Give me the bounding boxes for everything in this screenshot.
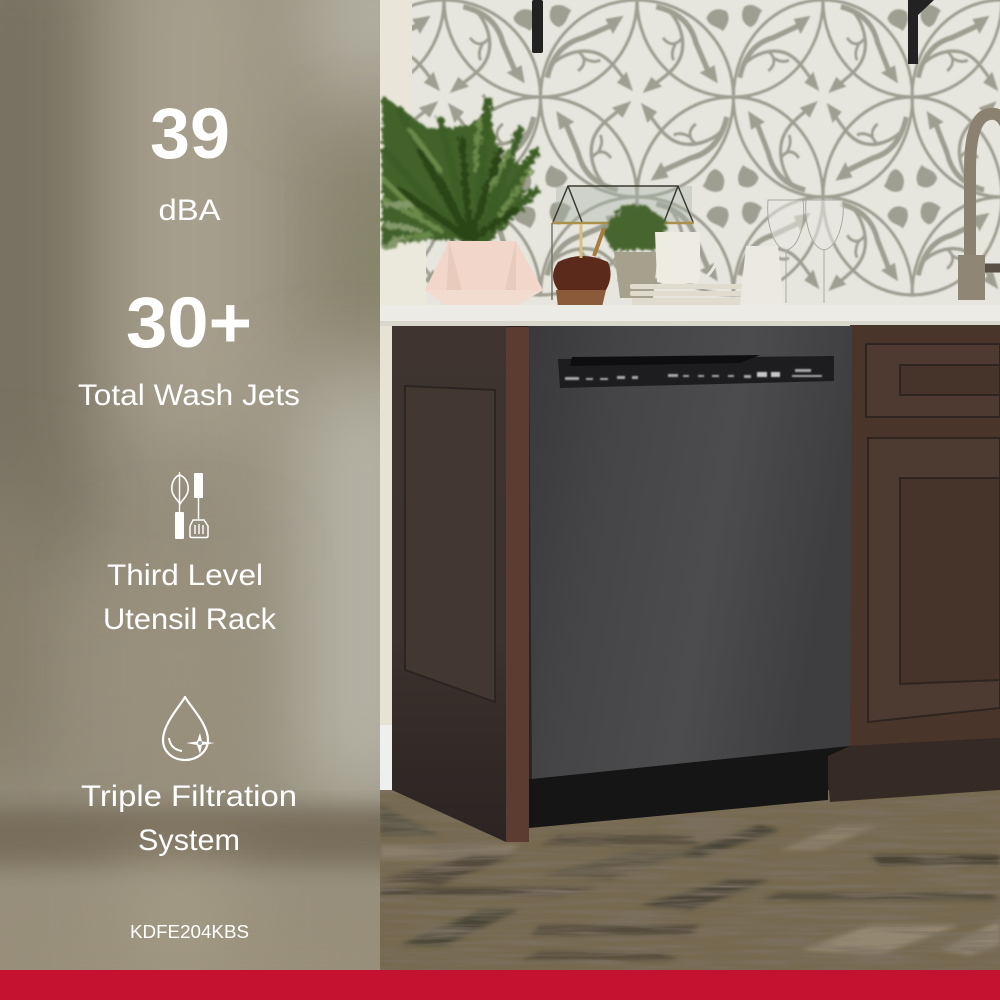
model number: KDFE204KBS (130, 922, 249, 942)
left side cabinet panel (392, 326, 506, 842)
shelf brackets (532, 0, 934, 64)
icon: whisk and spatula (172, 472, 208, 539)
small terrarium plant (602, 205, 668, 250)
faucet (958, 114, 1000, 300)
ceramic pitcher (740, 246, 784, 305)
kitchen photo (348, 0, 1000, 970)
lower backing (393, 325, 1000, 800)
icon: water drop with sparkle (163, 697, 215, 760)
dishwasher door (529, 326, 852, 779)
red footer band (0, 970, 1000, 1000)
right base cabinet (826, 325, 1000, 802)
backsplash wall (380, 0, 1000, 310)
stack of plates (630, 284, 744, 305)
stat: 30+ total wash jets (78, 284, 300, 412)
toe kick (529, 746, 850, 828)
sage planter (614, 252, 658, 298)
text: third level utensil rack (103, 559, 277, 636)
fern plant (382, 95, 536, 248)
pink geometric pot (425, 241, 543, 306)
brown clay pot (553, 224, 611, 307)
tile pattern (348, 0, 1000, 295)
left frosted panel (0, 0, 430, 1000)
countertop (380, 305, 1000, 326)
floor (380, 790, 1000, 970)
white mug (655, 232, 719, 284)
baseboard (380, 725, 397, 796)
text: triple filtration system (81, 780, 297, 857)
text: third level utensil rack: Third Level (107, 559, 263, 592)
text: third level utensil rack: Utensil Rack (103, 603, 277, 636)
stat: 30+ total wash jets: 30+ (126, 284, 252, 363)
wine glasses (768, 200, 843, 303)
glass terrarium (552, 186, 694, 300)
text: triple filtration system: System (138, 824, 240, 857)
door front (868, 438, 1000, 722)
dishwasher (529, 326, 852, 828)
left plain wall (380, 0, 412, 310)
control panel (558, 355, 834, 388)
stat: 39 dBA: dBA (158, 194, 220, 227)
drawer front (866, 344, 1000, 417)
stat: 39 dBA (150, 95, 230, 227)
cabinet post (506, 327, 529, 842)
stat: 39 dBA: 39 (150, 95, 230, 174)
wall below counter (380, 326, 393, 726)
stat: 30+ total wash jets: Total Wash Jets (78, 379, 300, 412)
text: triple filtration system: Triple Filtration (81, 780, 297, 813)
